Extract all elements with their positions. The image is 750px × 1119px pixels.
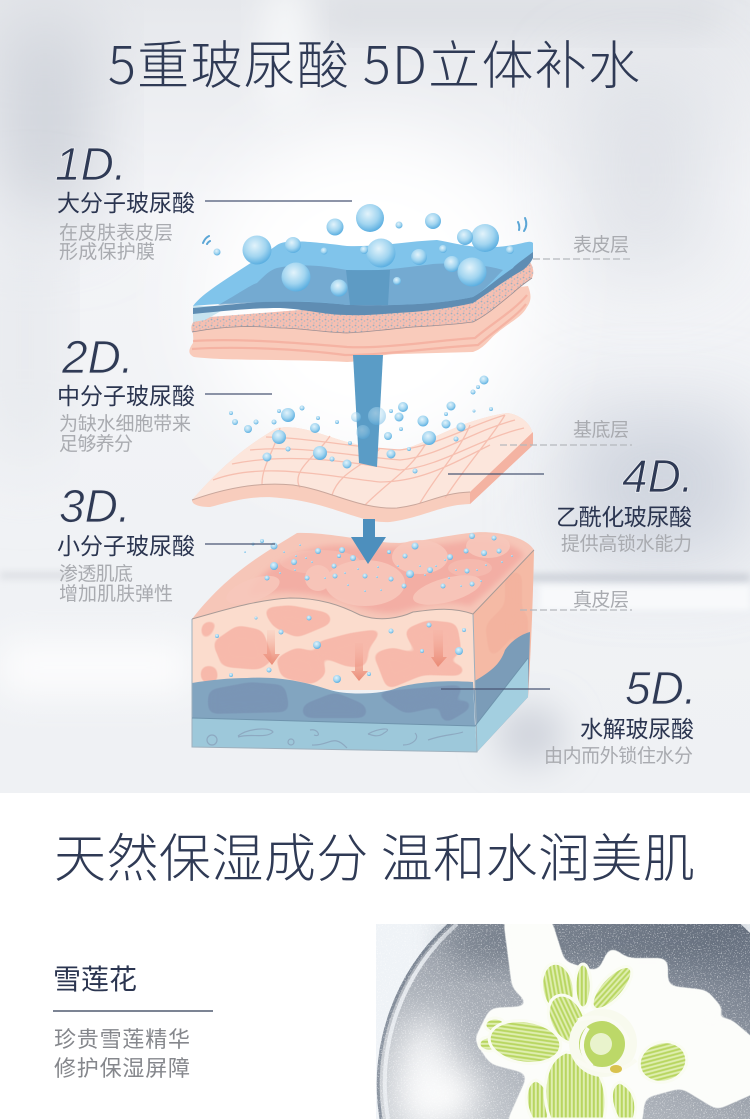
water swooshes [203, 218, 526, 244]
basal layer [192, 413, 533, 522]
label: 3D [57, 480, 275, 605]
ingredient text: 雪莲花 [53, 958, 137, 998]
section heading: 天然保湿成分 温和水润美肌 [54, 817, 695, 892]
title: 5重玻尿酸 5D立体补水 [108, 24, 640, 99]
label: 3D: 小分子玻尿酸 [57, 527, 195, 561]
label: dermis: 真皮层 [573, 589, 629, 611]
label: 2D [57, 331, 272, 455]
large bubbles [214, 204, 514, 296]
label: 4D [448, 450, 694, 555]
panel: skin diagram [189, 204, 534, 752]
label: 5D: 5D. [625, 662, 697, 714]
blue arrow [351, 519, 386, 564]
medium bubbles [229, 376, 493, 474]
label: basal layer [500, 419, 632, 445]
image: snow lotus in glass dish [376, 918, 750, 1119]
green petals [479, 961, 691, 1119]
ingredient text: 珍贵雪莲精华 [54, 1027, 190, 1052]
label: 2D: 中分子玻尿酸 [57, 377, 195, 411]
white petals [474, 918, 750, 1119]
label: 1D [55, 138, 352, 263]
label: epidermis [533, 234, 632, 259]
downward arrows [263, 630, 447, 681]
label: epidermis: 表皮层 [573, 234, 629, 256]
epidermis layer [189, 240, 533, 362]
label: 5D: 由内而外锁住水分 [544, 745, 693, 767]
ingredient text: 修护保湿屏障 [54, 1056, 190, 1081]
label: 1D: 在皮肤表皮层 [59, 222, 173, 244]
label: 1D: 1D. [55, 138, 127, 190]
label: 4D: 提供高锁水能力 [561, 533, 692, 555]
label: 1D: 形成保护膜 [59, 241, 155, 263]
label: 1D: 大分子玻尿酸 [57, 184, 195, 218]
label: 3D: 3D. [59, 480, 131, 532]
blue funnel [353, 355, 383, 467]
label: dermis [520, 589, 632, 611]
label: 4D: 乙酰化玻尿酸 [556, 498, 692, 532]
ingredient text [53, 958, 213, 1081]
label: 3D: 渗透肌底 [59, 563, 133, 585]
label: 4D: 4D. [622, 450, 694, 502]
label: 2D: 为缺水细胞带来 [59, 413, 191, 435]
glass dish [376, 924, 750, 1119]
flower core [569, 1009, 637, 1077]
label: 5D: 水解玻尿酸 [580, 710, 694, 744]
label: 2D: 2D. [61, 331, 134, 383]
label: basal layer: 基底层 [573, 419, 629, 441]
label: 5D [441, 662, 697, 767]
dermis block [192, 532, 534, 752]
tissue blobs [200, 605, 466, 690]
small bubbles [215, 533, 513, 683]
label: 2D: 足够养分 [59, 433, 133, 455]
label: 3D: 增加肌肤弹性 [59, 583, 173, 605]
